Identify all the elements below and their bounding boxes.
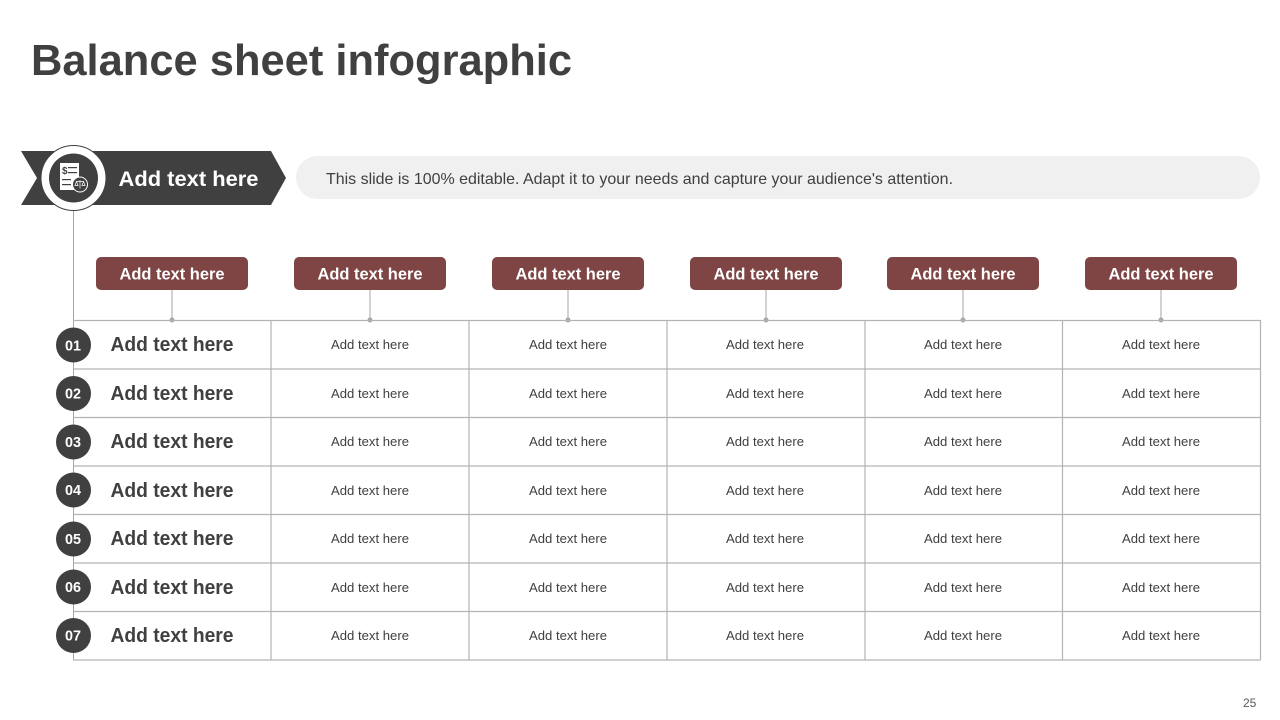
banner label: Add text here — [118, 168, 258, 191]
row 4: 04 — [65, 482, 82, 499]
row 4: Add text here — [331, 484, 409, 498]
row 5: Add text here — [110, 528, 234, 550]
title: Balance sheet infographic — [31, 36, 572, 85]
row 1: Add text here — [726, 338, 804, 352]
row 7: Add text here — [924, 629, 1002, 643]
row 3: Add text here — [726, 435, 804, 449]
row 5: 05 — [65, 531, 81, 548]
row 7: Add text here — [110, 625, 234, 647]
column header 3: Add text here — [516, 266, 620, 284]
row 1: Add text here — [331, 338, 409, 352]
row 4: Add text here — [110, 480, 234, 502]
row 7: Add text here — [331, 629, 409, 643]
row 1 — [56, 328, 1200, 362]
row 5: Add text here — [924, 532, 1002, 546]
icon: document with scales: $ — [62, 166, 68, 177]
row 7: Add text here — [1122, 629, 1200, 643]
row 7 — [56, 618, 1200, 653]
row 2: Add text here — [924, 387, 1002, 401]
row 5: Add text here — [1122, 532, 1200, 546]
row 4: Add text here — [924, 484, 1002, 498]
row 6: Add text here — [726, 581, 804, 595]
column header 2 — [294, 257, 446, 322]
row 2: Add text here — [1122, 387, 1200, 401]
column header 6: Add text here — [1108, 266, 1214, 284]
row 5: Add text here — [331, 532, 409, 546]
row 4: Add text here — [529, 484, 607, 498]
row 1: 01 — [65, 338, 81, 354]
table — [56, 320, 1260, 660]
row 4: Add text here — [1122, 484, 1200, 498]
row 3: Add text here — [331, 435, 409, 449]
row 2: Add text here — [331, 387, 409, 401]
row 1: Add text here — [110, 334, 234, 356]
row 7: Add text here — [529, 629, 607, 643]
column header 1: Add text here — [120, 266, 224, 284]
row 3: Add text here — [110, 431, 234, 453]
row 3 — [56, 424, 1200, 460]
column header 1 — [96, 257, 248, 322]
row 1: Add text here — [529, 338, 607, 352]
row 7: Add text here — [726, 629, 804, 643]
column header 3 — [492, 257, 644, 322]
row 3: 03 — [65, 434, 81, 451]
row 2: 02 — [65, 386, 81, 402]
row 1: Add text here — [924, 338, 1002, 352]
row 7: 07 — [65, 628, 81, 644]
column header 4: Add text here — [714, 266, 818, 284]
banner icon badge — [41, 146, 106, 210]
row 5 — [56, 522, 1200, 556]
row 4 — [56, 472, 1200, 508]
column header 6 — [1085, 257, 1237, 322]
row 5: Add text here — [529, 532, 607, 546]
row 2 — [56, 376, 1200, 411]
row 5: Add text here — [726, 532, 804, 546]
column header 5 — [887, 257, 1039, 322]
connector line from banner to table — [72, 205, 74, 660]
banner — [21, 146, 286, 210]
row 3: Add text here — [529, 435, 607, 449]
column header 5: Add text here — [910, 266, 1016, 284]
row 6 — [56, 570, 1200, 604]
description pill: This slide is 100% editable. Adapt it to your needs and capture your audience's attention. — [326, 171, 953, 188]
column header 2: Add text here — [318, 266, 422, 284]
row 4: Add text here — [726, 484, 804, 498]
row 6: 06 — [65, 579, 81, 596]
row 3: Add text here — [924, 435, 1002, 449]
row 6: Add text here — [331, 581, 409, 595]
row 6: Add text here — [924, 581, 1002, 595]
column header 4 — [690, 257, 842, 322]
row 2: Add text here — [529, 387, 607, 401]
row 2: Add text here — [110, 383, 234, 405]
row 6: Add text here — [1122, 581, 1200, 595]
row 6: Add text here — [110, 577, 234, 599]
description pill — [296, 156, 1260, 199]
row 2: Add text here — [726, 387, 804, 401]
row 1: Add text here — [1122, 338, 1200, 352]
page number: 25 — [1243, 696, 1257, 710]
row 6: Add text here — [529, 581, 607, 595]
row 3: Add text here — [1122, 435, 1200, 449]
